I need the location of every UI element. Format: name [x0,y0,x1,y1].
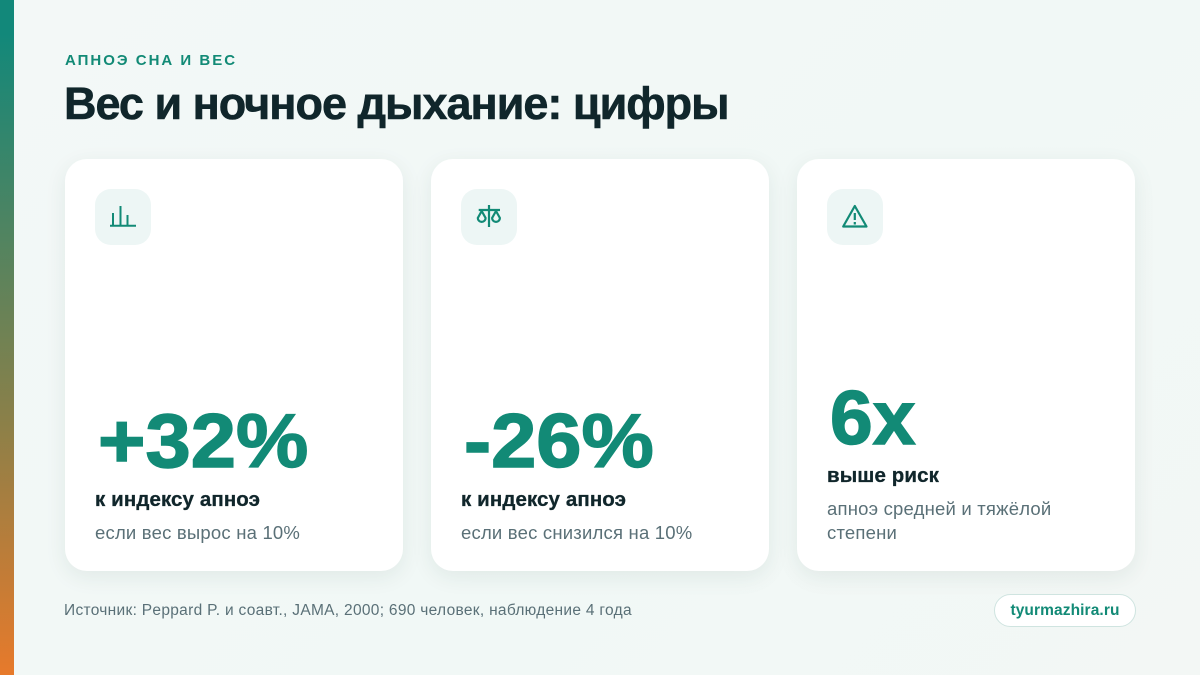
site badge [994,594,1136,627]
stat: +32%: +32% [98,399,308,484]
note: severity: степени [827,522,897,543]
icon: scales [461,189,517,245]
note: severity: апноэ средней и тяжёлой [827,498,1051,519]
note: weight loss: если вес снизился на 10% [461,522,692,543]
icon: bar chart [95,189,151,245]
label: apnea index: к индексу апноэ [95,488,260,511]
panel: sixfold risk [797,159,1135,571]
site badge: tyurmazhira.ru [1010,602,1120,619]
left accent bar [0,0,14,675]
stat: 6x: 6x [830,376,915,461]
title: Вес и ночное дыхание: цифры [64,78,729,129]
icon: warning triangle [827,189,883,245]
note: weight gain: если вес вырос на 10% [95,522,300,543]
label: higher risk: выше риск [827,464,939,487]
panel: weight gain [65,159,403,571]
eyebrow heading: АПНОЭ СНА И ВЕС [65,52,237,69]
panel: weight loss [431,159,769,571]
note: severity [827,498,1051,543]
label: apnea index: к индексу апноэ [461,488,626,511]
stat: -26%: -26% [464,399,654,484]
source note: Источник: Peppard P. и соавт., JAMA, 2000; 690 человек, наблюдение 4 года [64,602,632,619]
